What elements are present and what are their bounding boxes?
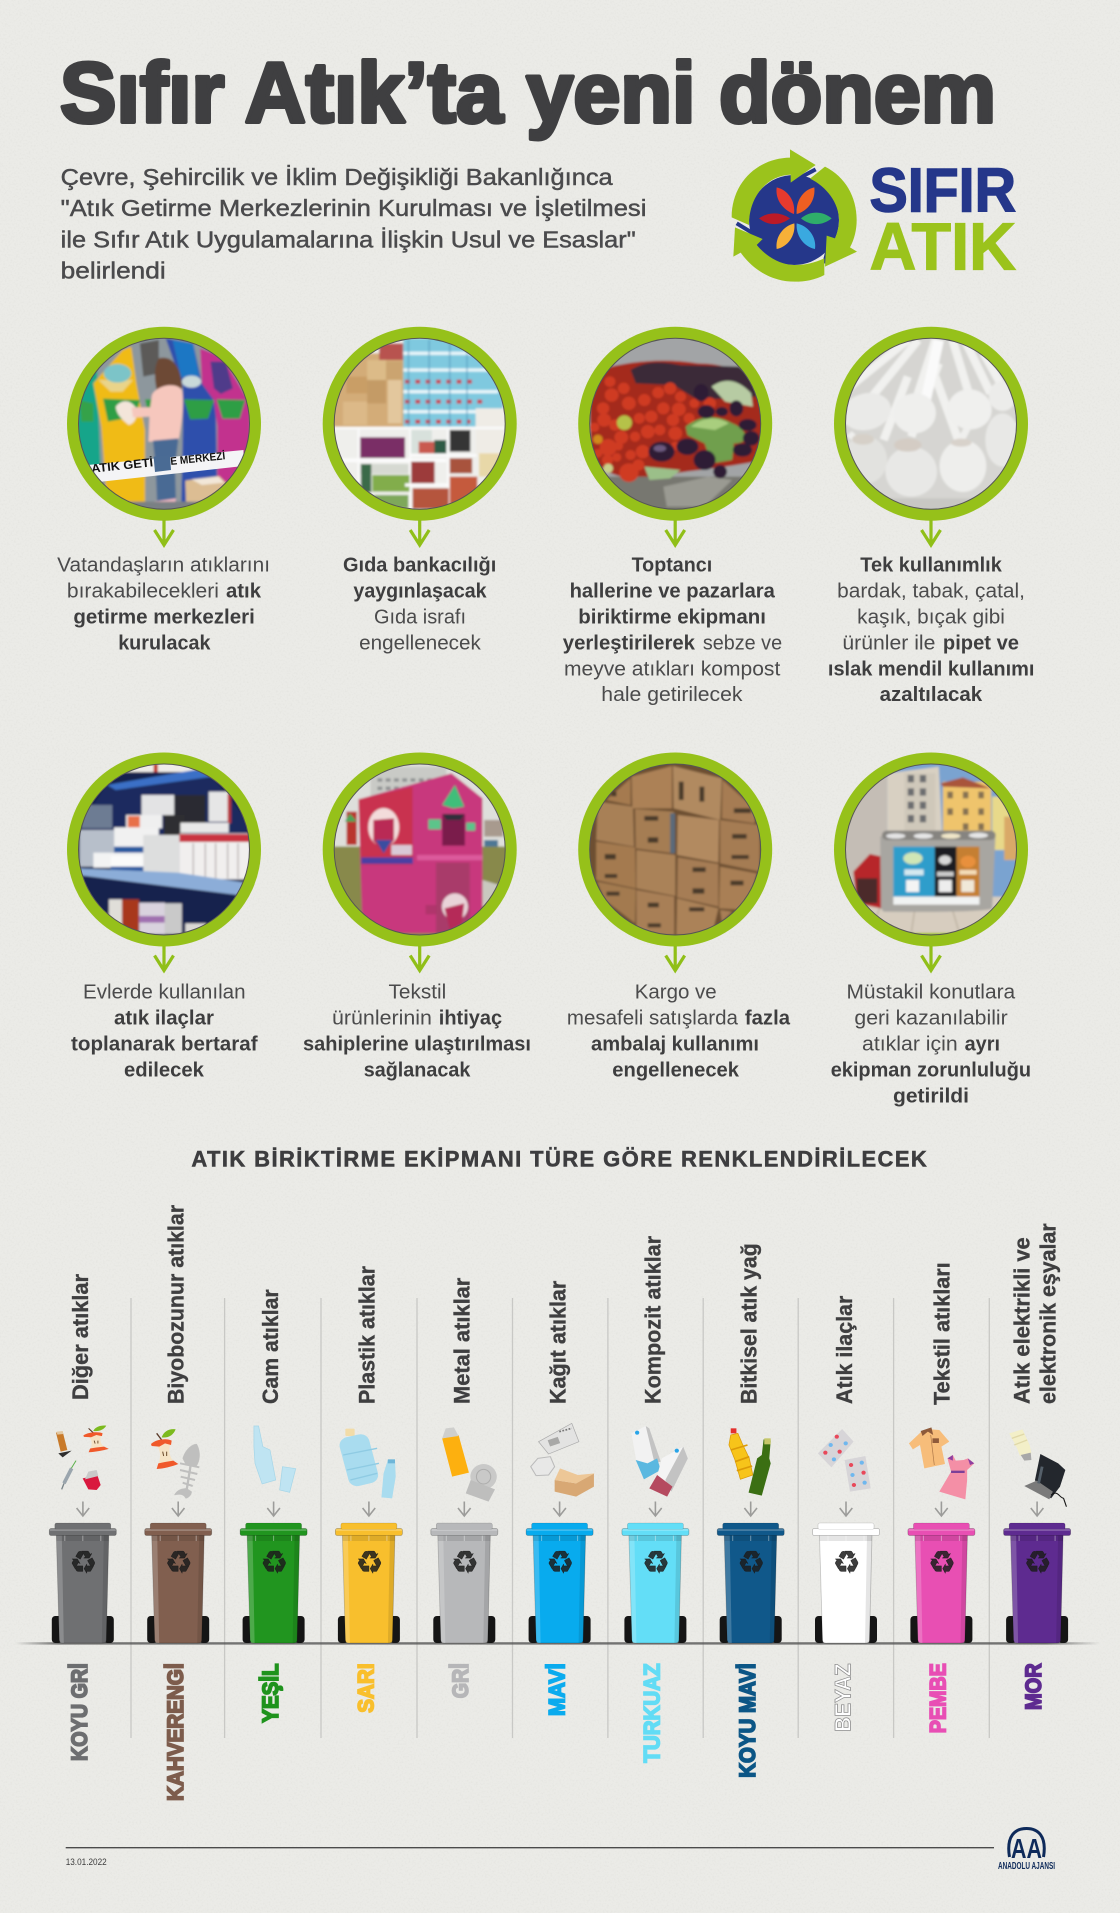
- bin: brown: [145, 1523, 212, 1643]
- caption: ıslak mendil kullanımı: [828, 657, 1034, 680]
- icon: fish skeleton: [174, 1444, 200, 1498]
- icon: crushed red cup: [83, 1470, 101, 1490]
- intro paragraph: ile Sıfır Atık Uygulamalarına İlişkin Usul ve Esaslar": [61, 226, 636, 252]
- logo wordmark: [870, 157, 1016, 284]
- photo circle: vegetable waste: [578, 327, 772, 521]
- icon: pill blisters: [818, 1429, 871, 1492]
- waste type labels: Bitkisel atık yağ: [736, 1243, 761, 1404]
- icon: oil bottles: [729, 1428, 771, 1496]
- caption: atık: [226, 580, 262, 603]
- waste icons: glass, plastic, metal, paper: [254, 1423, 579, 1502]
- caption: Vatandaşların atıklarını: [57, 554, 270, 577]
- intro paragraph: belirlendi: [61, 257, 166, 283]
- panel: wholesale markets compost: [563, 327, 782, 706]
- waste icons: paper box, composite, oil, medicine, textile, electronics: [555, 1426, 1066, 1507]
- colour name labels: BEYAZ: [831, 1663, 856, 1732]
- bin: yellow: [335, 1523, 402, 1643]
- photo circle: cardboard boxes: [578, 752, 772, 946]
- colour name labels: MAVİ: [544, 1663, 569, 1716]
- panel: waste collection centres: [57, 327, 270, 654]
- caption: getirildi: [893, 1085, 969, 1108]
- caption: ürünlerinin: [332, 1007, 432, 1030]
- waste type labels: Diğer atıklar: [68, 1274, 93, 1400]
- arrow: [666, 946, 685, 970]
- date: 13.01.2022: [66, 1857, 107, 1868]
- caption: yerleştirilerek: [563, 631, 696, 654]
- caption: bardak, tabak, çatal,: [837, 580, 1025, 603]
- arrow: [666, 520, 685, 545]
- waste type labels: Tekstil atıkları: [929, 1262, 954, 1405]
- caption: toplanarak bertaraf: [71, 1033, 258, 1056]
- bin: dark grey: [49, 1523, 116, 1643]
- arrow: [154, 946, 174, 970]
- caption: ürünler ile: [842, 631, 935, 654]
- icon: apple core: [151, 1429, 178, 1469]
- caption: hallerine ve pazarlara: [570, 580, 775, 603]
- caption: sahiplerine ulaştırılması: [303, 1033, 531, 1056]
- caption: meyve atıkları kompost: [564, 657, 781, 680]
- icon: plastic water jug and bottle: [338, 1429, 396, 1498]
- colour name labels: KOYU MAVİ: [735, 1663, 760, 1778]
- photo circle: plastic spoons: [834, 327, 1028, 521]
- caption: azaltılacak: [880, 683, 983, 706]
- arrow: [154, 520, 174, 545]
- caption: edilecek: [124, 1059, 204, 1082]
- icon: shirt and dress: [909, 1427, 974, 1499]
- caption: engellenecek: [359, 631, 482, 654]
- intro paragraph: "Atık Getirme Merkezlerinin Kurulması ve İşletilmesi: [61, 195, 646, 221]
- logo: Anadolu Ajansı: AA: [1011, 1833, 1042, 1864]
- caption: sebze ve: [703, 631, 782, 654]
- caption: Tek kullanımlık: [860, 554, 1002, 577]
- caption: Toptancı: [632, 554, 712, 577]
- panel: textile products: [303, 752, 531, 1082]
- icon: composite cartons: [631, 1426, 688, 1497]
- bin: dark blue: [717, 1523, 784, 1643]
- colour name labels: MOR: [1021, 1663, 1046, 1710]
- icon: crumpled paper, newspaper: [531, 1423, 579, 1476]
- intro paragraph: [61, 164, 646, 283]
- bin: turquoise: [622, 1523, 689, 1643]
- arrow: [922, 520, 940, 545]
- logo: Anadolu Ajansı: ANADOLU AJANSI: [998, 1861, 1055, 1872]
- caption: Gıda israfı: [374, 605, 466, 628]
- title: Sıfır Atık’ta yeni dönem: [60, 46, 996, 141]
- colour name labels: KAHVERENGİ: [163, 1663, 188, 1801]
- caption: Gıda bankacılığı: [343, 554, 496, 577]
- caption: atık ilaçlar: [114, 1007, 214, 1030]
- photo circle: food bank shelves: [323, 327, 517, 521]
- icon: syringe: [62, 1461, 76, 1489]
- icon: small apple core: [83, 1426, 109, 1452]
- waste type labels: Atık ilaçlar: [832, 1295, 857, 1404]
- bin: grey: [431, 1523, 498, 1643]
- caption: atıklar için: [862, 1033, 958, 1056]
- bin: green: [240, 1523, 307, 1643]
- logo wordmark: SIFIR: [870, 157, 1016, 226]
- icon: recycling ring and flower: [732, 149, 857, 282]
- photo circle: citizen at collection centre: E MERKEZİ: [170, 449, 226, 468]
- caption: getirme merkezleri: [73, 605, 255, 628]
- waste type labels: Atık elektrikli ve: [1009, 1237, 1034, 1404]
- section heading: ATIK BİRİKTİRME EKİPMANI TÜRE GÖRE RENKLENDİRİLECEK: [191, 1147, 927, 1172]
- icon: bulb and kettle: [1009, 1429, 1066, 1507]
- bin: purple: [1004, 1523, 1071, 1643]
- caption: ekipman zorunluluğu: [831, 1059, 1031, 1082]
- caption: kurulacak: [118, 631, 211, 654]
- bins row: [49, 1523, 1071, 1643]
- bin: blue: [526, 1523, 593, 1643]
- small arrows into bins: [77, 1502, 1043, 1516]
- caption: [563, 554, 782, 706]
- logo wordmark: ATIK: [870, 209, 1016, 284]
- caption: fazla: [745, 1007, 791, 1030]
- waste type labels: Metal atıklar: [449, 1277, 474, 1404]
- caption: Kargo ve: [635, 981, 717, 1004]
- caption: [343, 554, 496, 654]
- caption: ambalaj kullanımı: [591, 1033, 759, 1056]
- caption: engellenecek: [612, 1059, 740, 1082]
- arrow: [410, 520, 429, 545]
- caption: sağlanacak: [364, 1059, 471, 1082]
- icon: cigarette butt: [56, 1431, 72, 1457]
- caption: yaygınlaşacak: [353, 580, 487, 603]
- caption: [831, 981, 1031, 1108]
- intro paragraph: Çevre, Şehircilik ve İklim Değişikliği Bakanlığınca: [61, 164, 613, 190]
- caption: mesafeli satışlarda: [567, 1007, 738, 1030]
- caption: ihtiyaç: [439, 1007, 502, 1030]
- panel: detached houses: [831, 752, 1031, 1108]
- waste type labels: Kağıt atıklar: [545, 1280, 570, 1404]
- photo circle: citizen at collection centre: ATIK GETİ: [90, 454, 154, 476]
- arrow: [922, 946, 940, 970]
- waste type labels: Plastik atıklar: [354, 1266, 379, 1404]
- panel: cargo packaging: [567, 752, 791, 1082]
- colour name labels: KOYU GRİ: [67, 1663, 92, 1761]
- ground line: [15, 1642, 1100, 1645]
- caption: [57, 554, 270, 654]
- colour name labels: SARI: [354, 1663, 379, 1713]
- photo circle: separate waste equipment: [834, 752, 1028, 946]
- waste type labels: Kompozit atıklar: [641, 1236, 666, 1404]
- panel: food banking: [323, 327, 517, 654]
- photo circle: pink textile bin: [323, 752, 517, 946]
- caption: biriktirme ekipmanı: [578, 605, 766, 628]
- footer rule: [66, 1847, 994, 1849]
- caption: [828, 554, 1034, 706]
- panel: single-use plastics: [828, 327, 1034, 706]
- logo: Anadolu Ajansı: [998, 1828, 1055, 1872]
- logo: Sıfır Atık: [732, 149, 1016, 284]
- waste type labels: elektronik eşyalar: [1036, 1223, 1061, 1404]
- caption: [567, 981, 791, 1082]
- colour name labels: GRİ: [448, 1663, 473, 1698]
- colour name labels: [67, 1663, 1046, 1801]
- arrow: [410, 946, 429, 970]
- caption: kaşık, bıçak gibi: [857, 605, 1005, 628]
- waste icons: other and biodegradable: [56, 1426, 200, 1498]
- caption: hale getirilecek: [601, 683, 743, 706]
- caption: Müstakil konutlara: [846, 981, 1016, 1004]
- icon: cardboard box: [555, 1468, 595, 1497]
- colour name labels: PEMBE: [926, 1663, 951, 1733]
- caption: Evlerde kullanılan: [83, 981, 246, 1004]
- icon: glass bottle and cup: [254, 1426, 296, 1492]
- caption: geri kazanılabilir: [854, 1007, 1008, 1030]
- bin: pink: [908, 1523, 975, 1643]
- caption: [71, 981, 258, 1082]
- waste type labels: [68, 1205, 1061, 1405]
- waste type labels: Biyobozunur atıklar: [164, 1205, 189, 1404]
- caption: pipet ve: [943, 631, 1019, 654]
- photo circle: medicine shelves: [67, 752, 261, 946]
- caption: ayrı: [965, 1033, 1000, 1056]
- colour name labels: YEŞİL: [258, 1663, 283, 1723]
- bin: white: [812, 1523, 880, 1643]
- photo circle: citizen at collection centre: [67, 327, 261, 521]
- caption: bırakabilecekleri: [67, 580, 219, 603]
- caption: [303, 981, 531, 1082]
- icon: drink can and tin can: [442, 1427, 497, 1502]
- waste type labels: Cam atıklar: [258, 1289, 283, 1404]
- panel: waste medicines: [67, 752, 261, 1082]
- colour name labels: TURKUAZ: [639, 1663, 664, 1763]
- caption: Tekstil: [388, 981, 446, 1004]
